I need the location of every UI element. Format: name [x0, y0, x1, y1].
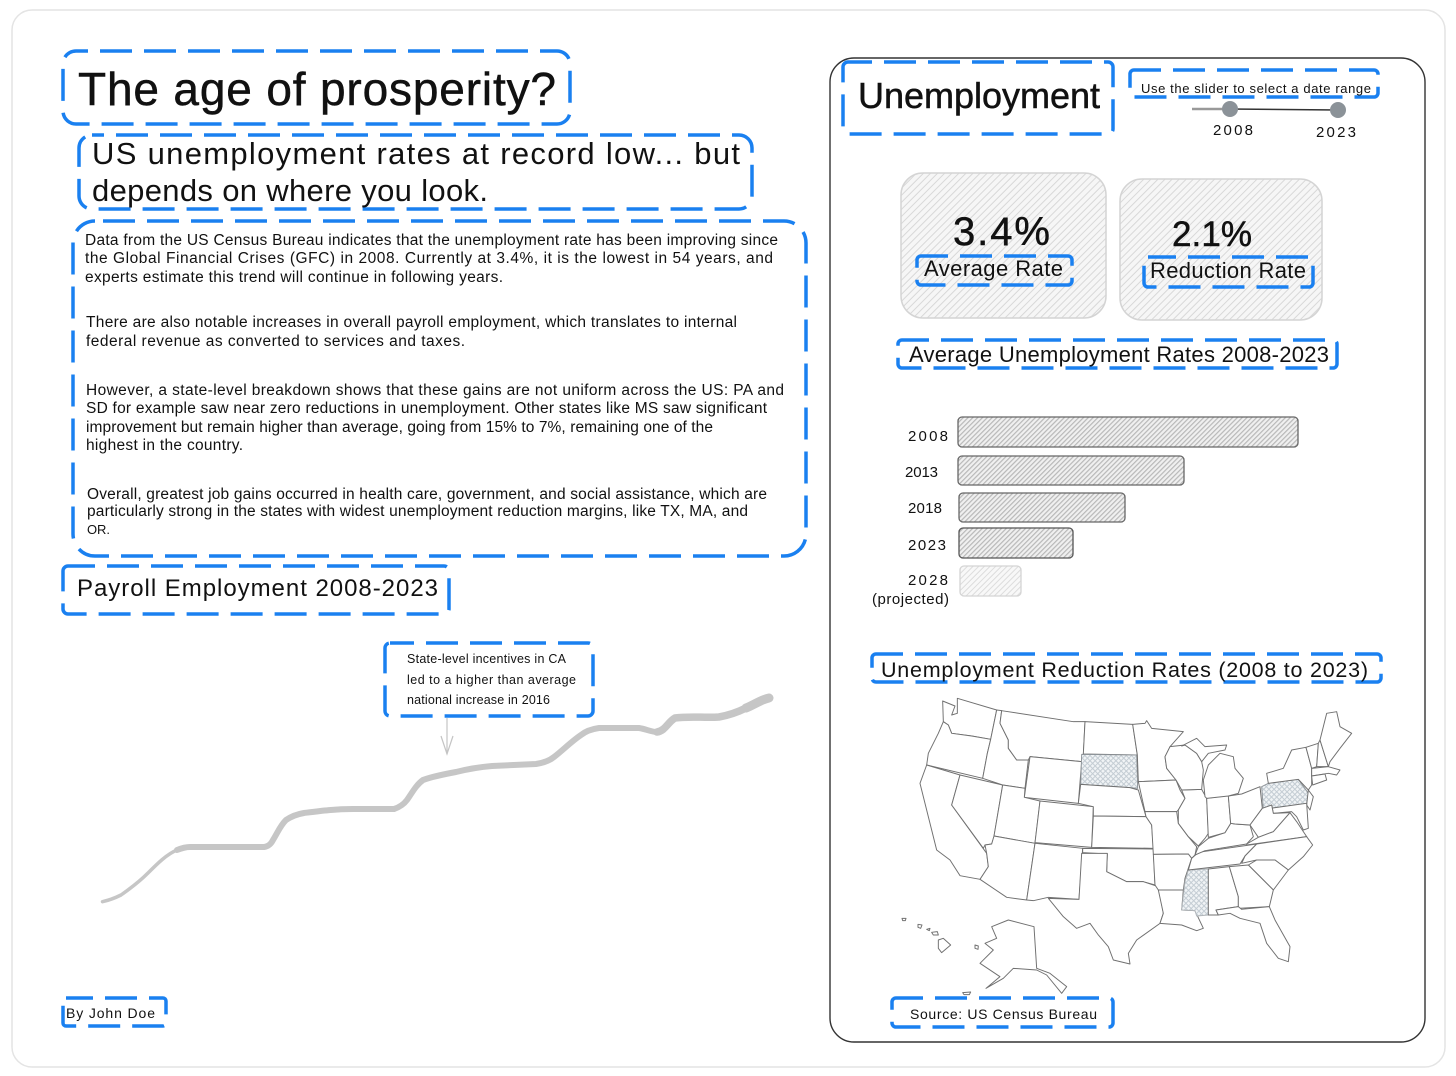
byline	[63, 998, 166, 1026]
bar: 2023: 2023	[908, 537, 946, 554]
subtitle: depends on where you look.	[92, 173, 488, 208]
bar chart: average unemployment rates	[872, 417, 1298, 608]
line chart: payroll employment	[102, 698, 769, 902]
bar: 2028 projected	[872, 566, 1021, 608]
source note	[892, 998, 1113, 1027]
map: US states	[902, 698, 1352, 995]
KPI card: average rate: 3.4%	[953, 210, 1050, 254]
callout: California incentives	[385, 643, 593, 716]
slider instruction: Use the slider to select a date range	[1141, 81, 1371, 96]
date range slider: 2008	[1213, 122, 1253, 139]
arrow: callout to line	[441, 718, 453, 754]
date range slider: 2023	[1316, 124, 1356, 141]
bar: 2028 projected: (projected)	[872, 591, 949, 608]
KPI card: reduction rate: 2.1%	[1172, 215, 1252, 254]
bar: 2008: 2008	[908, 428, 948, 445]
bar: 2018	[908, 493, 1125, 522]
panel: narrative text	[73, 221, 806, 556]
bar: 2023	[908, 528, 1073, 558]
slider instruction	[1130, 70, 1378, 97]
title	[63, 51, 570, 124]
bar: 2028 projected: 2028	[908, 572, 948, 589]
callout: California incentives: national increase in 2016	[407, 693, 550, 707]
heading: payroll employment: Payroll Employment 2008-2023	[77, 575, 438, 602]
KPI card: reduction rate	[1120, 179, 1322, 320]
panel: narrative text: Data from the US Census Bureau indicates that the unemployment rate has been improving since	[85, 232, 778, 249]
panel: narrative text: However, a state-level breakdown shows that these gains are not uniform across the US: PA and	[86, 382, 784, 399]
panel: narrative text: improvement but remain higher than average, going from 15% to 7%, remaining one of the	[86, 419, 713, 436]
callout: California incentives: led to a higher than average	[407, 673, 576, 687]
heading: unemployment reduction rates: Unemployment Reduction Rates (2008 to 2023)	[881, 658, 1368, 682]
heading: unemployment	[843, 62, 1113, 134]
panel: narrative text: OR.	[87, 522, 110, 537]
subtitle	[79, 135, 752, 209]
bar: 2018: 2018	[908, 500, 942, 517]
bar: 2013: 2013	[905, 464, 938, 481]
callout: California incentives: State-level incentives in CA	[407, 652, 567, 666]
panel: narrative text: highest in the country.	[86, 437, 243, 454]
byline: By John Doe	[66, 1005, 155, 1021]
panel: narrative text: There are also notable increases in overall payroll employment, which translates to internal	[86, 314, 737, 331]
bar: 2013	[905, 456, 1184, 485]
bar: 2008	[908, 417, 1298, 447]
panel: narrative text: SD for example saw near zero reductions in unemployment. Other states like MS saw significant	[86, 400, 768, 417]
panel: narrative text: Overall, greatest job gains occurred in health care, government, and social assistance, which are	[87, 486, 767, 503]
panel: unemployment dashboard	[830, 58, 1425, 1042]
KPI card: average rate: Average Rate	[924, 256, 1063, 281]
title: The age of prosperity?	[78, 63, 556, 115]
heading: average unemployment rates: Average Unemployment Rates 2008-2023	[909, 342, 1329, 367]
source note: Source: US Census Bureau	[910, 1006, 1097, 1022]
panel: narrative text: federal revenue as converted to services and taxes.	[86, 333, 465, 350]
subtitle: US unemployment rates at record low... but	[92, 136, 740, 171]
heading: unemployment: Unemployment	[858, 75, 1100, 116]
panel: narrative text: particularly strong in the states with widest unemployment reduction margins, like TX, MA, and	[87, 503, 748, 520]
KPI card: average rate	[901, 173, 1106, 318]
date range slider	[1192, 101, 1356, 141]
KPI card: reduction rate: Reduction Rate	[1150, 258, 1306, 283]
panel: narrative text: the Global Financial Crises (GFC) in 2008. Currently at 3.4%, it is the lowest in 54 years, and	[85, 250, 773, 267]
heading: payroll employment	[63, 566, 449, 614]
panel: narrative text: experts estimate this trend will continue in following years.	[85, 269, 503, 286]
